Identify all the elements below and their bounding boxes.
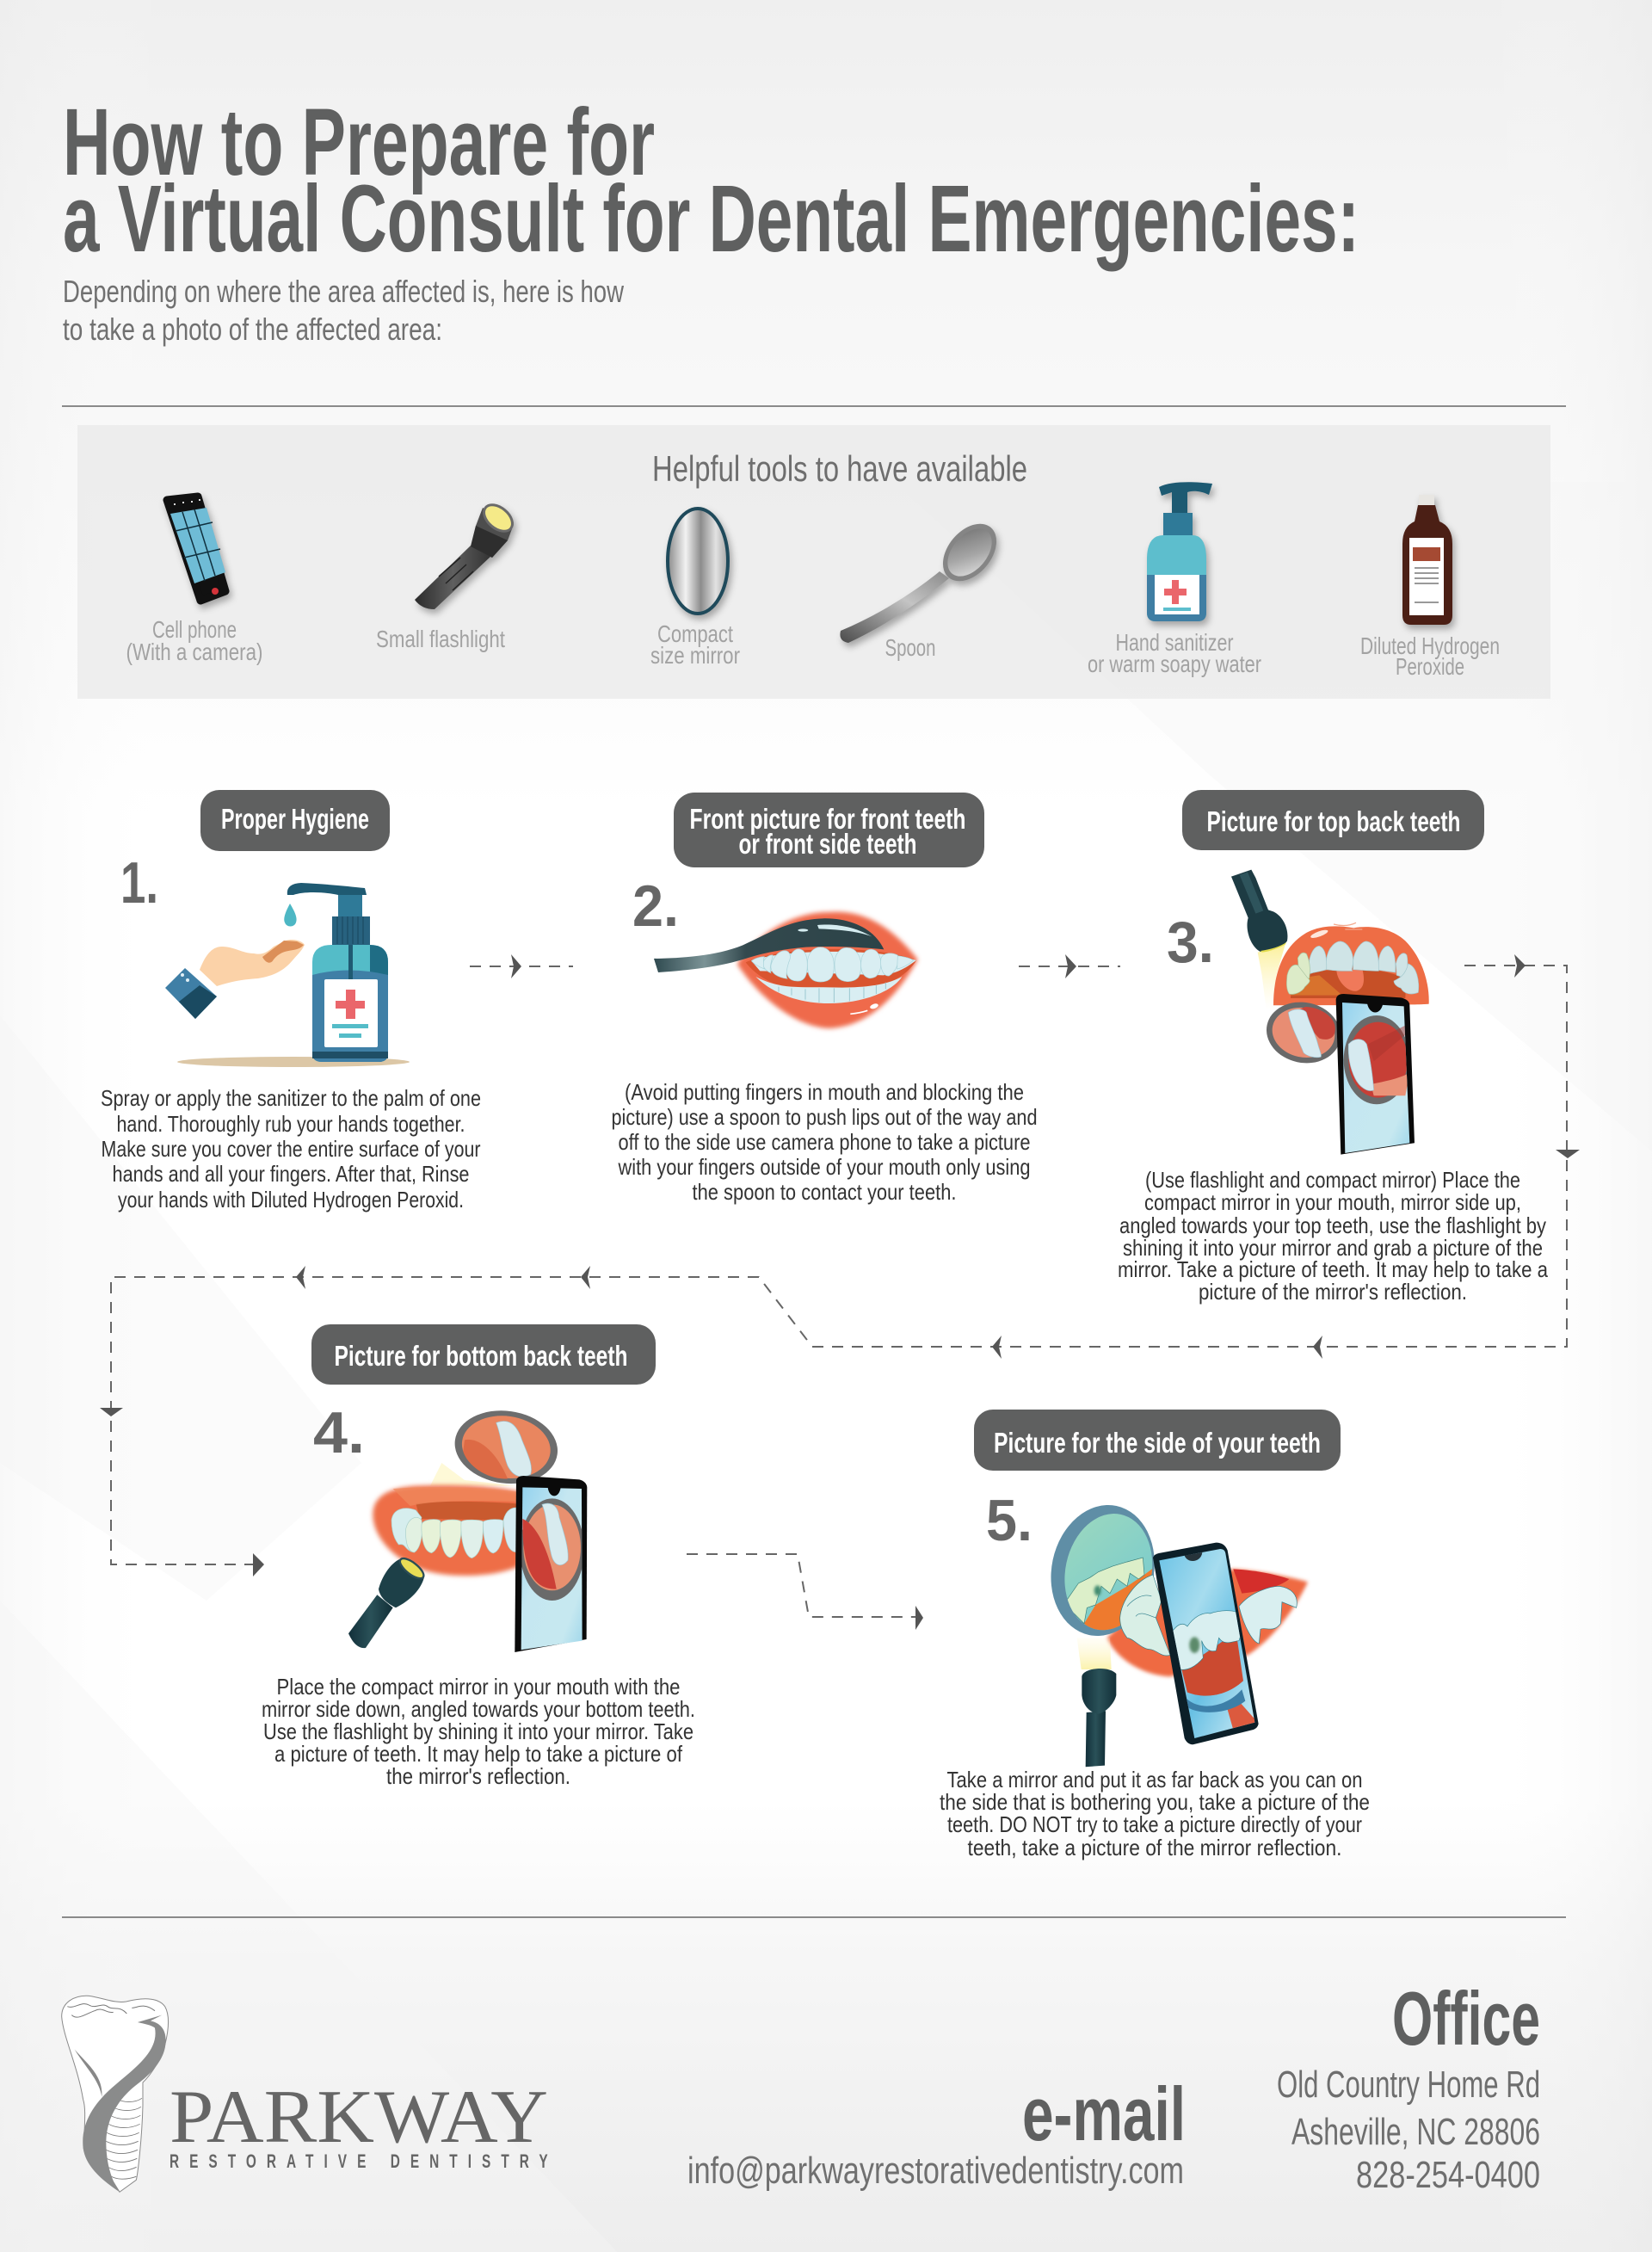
contact: office: Office <box>1392 1976 1540 2061</box>
text 3: picture of the mirror's reflection. <box>1199 1279 1467 1305</box>
subtitle: Depending on where the area affected is, here is how <box>63 274 625 309</box>
step 1: proper hygiene <box>101 790 481 1212</box>
step 2: front teeth <box>611 793 1038 1205</box>
step 5: side of teeth <box>940 1410 1370 1860</box>
contact: office: 828-254-0400 <box>1356 2154 1540 2196</box>
number 3: 3. <box>1167 910 1214 975</box>
icon: side teeth with mirror, flashlight and phone <box>1039 1496 1308 1767</box>
text 1: hands and all your fingers. After that, Rinse <box>112 1161 470 1187</box>
text 4: Place the compact mirror in your mouth with the <box>277 1674 680 1700</box>
step 4: bottom back teeth <box>262 1324 695 1789</box>
icon: sanitizer and hand <box>165 883 410 1067</box>
subtitle: to take a photo of the affected area: <box>63 312 442 347</box>
heading pill 1: Proper Hygiene <box>221 803 369 835</box>
text 2: picture) use a spoon to push lips out of the way and <box>611 1104 1038 1130</box>
heading pill 4: Picture for bottom back teeth <box>334 1340 628 1372</box>
icon: mouth with spoon <box>654 912 918 1028</box>
title <box>63 89 1359 272</box>
logo tagline: RESTORATIVE DENTISTRY <box>170 2151 548 2173</box>
title: How to Prepare for <box>63 89 655 195</box>
heading pill 2: or front side teeth <box>738 828 917 860</box>
contact: e-mail: e-mail <box>1022 2071 1186 2156</box>
text 4: Use the flashlight by shining it into your mirror. Take <box>263 1718 693 1744</box>
text 2: (Avoid putting fingers in mouth and blocking the <box>625 1079 1024 1105</box>
tool: small flashlight <box>376 500 517 652</box>
icon: top teeth with mirror, flashlight and phone <box>1231 870 1429 1155</box>
text 2: with your fingers outside of your mouth only using <box>618 1154 1031 1180</box>
tool: cell phone: (With a camera) <box>126 639 263 665</box>
text 5: teeth, take a picture of the mirror reflection. <box>967 1835 1342 1860</box>
tool: hand sanitizer <box>1088 482 1261 677</box>
arrow: step 2 to 3 <box>1019 954 1120 978</box>
contact: e-mail <box>687 2071 1186 2192</box>
heading pill 2: Front picture for front teeth <box>690 803 965 835</box>
number 2: 2. <box>632 873 679 939</box>
text 4: mirror side down, angled towards your bottom teeth. <box>262 1696 695 1722</box>
text 5: the side that is bothering you, take a picture of the <box>940 1789 1370 1815</box>
contact: office <box>1277 1976 1540 2196</box>
tool: spoon: Spoon <box>885 634 936 661</box>
text 4: a picture of teeth. It may help to take a picture of <box>274 1741 683 1767</box>
text 5: Take a mirror and put it as far back as you can on <box>946 1767 1363 1792</box>
number 1: 1. <box>120 850 158 916</box>
arrow: step 4 to 5 <box>687 1554 923 1630</box>
tool: hydrogen peroxide bottle: Peroxide <box>1396 653 1464 680</box>
arrow: step 1 to 2 <box>470 954 573 978</box>
logo wordmark: PARKWAY <box>170 2076 548 2159</box>
text 2: off to the side use camera phone to take a picture <box>618 1129 1031 1155</box>
heading pill 3 <box>1182 790 1484 850</box>
tool: cell phone <box>126 497 263 665</box>
icon: bottom teeth with mirror, flashlight and phone <box>348 1404 587 1652</box>
tool: hand sanitizer: Hand sanitizer <box>1115 629 1234 656</box>
heading pill 2 <box>674 793 984 867</box>
tool: small flashlight: Small flashlight <box>376 626 505 652</box>
text 1: your hands with Diluted Hydrogen Peroxid. <box>118 1187 464 1212</box>
subtitle <box>63 274 625 347</box>
contact: e-mail: info@parkwayrestorativedentistry.com <box>687 2150 1184 2192</box>
text 3: angled towards your top teeth, use the flashlight by <box>1119 1212 1546 1238</box>
text 2 <box>611 1079 1038 1205</box>
text 3: compact mirror in your mouth, mirror side up, <box>1144 1189 1521 1215</box>
text 4 <box>262 1674 695 1789</box>
text 3: shining it into your mirror and grab a picture of the <box>1123 1235 1543 1261</box>
number 4: 4. <box>313 1400 365 1465</box>
step 3: top back teeth <box>1118 790 1548 1305</box>
text 3 <box>1118 1167 1548 1305</box>
tool: compact mirror <box>650 509 740 669</box>
text 1 <box>101 1085 481 1212</box>
panel heading: Helpful tools to have available <box>652 448 1027 489</box>
text 3: (Use flashlight and compact mirror) Place the <box>1145 1167 1520 1193</box>
tool: compact mirror: size mirror <box>650 642 740 669</box>
text 5 <box>940 1767 1370 1860</box>
footer logo <box>62 1996 548 2192</box>
number 5: 5. <box>986 1488 1032 1553</box>
text 5: teeth. DO NOT try to take a picture directly of your <box>947 1811 1362 1837</box>
tool: hydrogen peroxide bottle: Diluted Hydrogen <box>1360 632 1500 659</box>
heading pill 5 <box>974 1410 1341 1471</box>
text 1: Spray or apply the sanitizer to the palm of one <box>101 1085 481 1111</box>
text 2: the spoon to contact your teeth. <box>692 1179 957 1205</box>
tool: compact mirror: Compact <box>657 620 733 647</box>
tool: spoon <box>840 514 1008 661</box>
heading pill 5: Picture for the side of your teeth <box>994 1427 1321 1459</box>
tool: hydrogen peroxide bottle <box>1360 495 1500 680</box>
text 1: Make sure you cover the entire surface of your <box>102 1136 481 1162</box>
heading pill 3: Picture for top back teeth <box>1206 805 1461 837</box>
arrow: step 3 to 4 <box>100 954 1580 1576</box>
heading pill 4 <box>311 1324 656 1385</box>
icon: tooth <box>62 1996 169 2192</box>
text 4: the mirror's reflection. <box>386 1763 570 1789</box>
text 1: hand. Thoroughly rub your hands together. <box>117 1111 465 1137</box>
contact: office: Asheville, NC 28806 <box>1291 2111 1540 2153</box>
tool: hand sanitizer: or warm soapy water <box>1088 651 1261 677</box>
heading pill 1 <box>200 790 390 851</box>
contact: office: Old Country Home Rd <box>1277 2064 1540 2106</box>
text 3: mirror. Take a picture of teeth. It may help to take a <box>1118 1256 1548 1282</box>
panel: helpful tools <box>77 425 1550 699</box>
tool: cell phone: Cell phone <box>152 616 237 643</box>
